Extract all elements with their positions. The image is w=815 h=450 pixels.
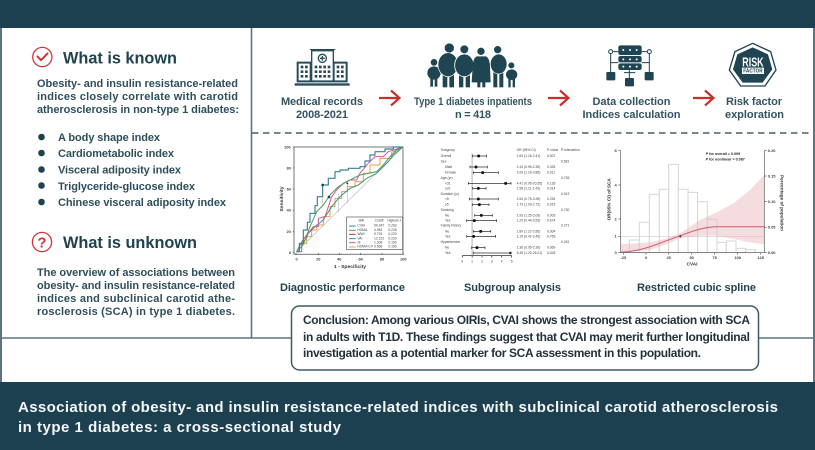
chart: ROC curves: 0.228 xyxy=(388,228,397,232)
chart: subgroup forest plot: 0.069 xyxy=(547,246,555,250)
chart: subgroup forest plot: 1.15 (0.42-3.45) xyxy=(517,234,540,238)
chart: ROC curves: Cutoff xyxy=(375,219,384,223)
chart: restricted cubic spline: 100 xyxy=(734,255,742,260)
chart: subgroup forest plot: 1.73 (1.09-2.72) xyxy=(517,203,540,207)
chart: subgroup forest plot: 0.028 xyxy=(547,251,555,255)
top banner xyxy=(0,0,815,28)
chart: restricted cubic spline: 75 xyxy=(712,255,718,260)
chart: subgroup forest plot: No xyxy=(445,229,449,233)
panel: what is unknown xyxy=(32,232,235,318)
chart: subgroup forest plot: Age (yr) xyxy=(441,176,453,180)
chart: restricted cubic spline: 0.20 xyxy=(768,148,776,153)
chart: ROC curves: Highest J xyxy=(387,219,402,223)
chart: ROC curves: 1 - Specificity xyxy=(334,264,366,270)
icon: red question circle xyxy=(32,232,52,252)
list of indices xyxy=(38,132,227,209)
chart: subgroup forest plot: 0.011 xyxy=(547,171,555,175)
chart: subgroup forest plot xyxy=(441,148,580,263)
chart: ROC curves: Sensitivity xyxy=(279,186,285,211)
chart: ROC curves: 20 xyxy=(286,229,292,234)
chart: restricted cubic spline: 0 xyxy=(615,250,618,255)
chart: subgroup forest plot: 1.93 (1.25-3.09) xyxy=(517,213,540,217)
text block: unknown summary: The overview of associations between xyxy=(37,267,235,279)
text block: unknown summary: rosclerosis (SCA) in type 1 diabetes. xyxy=(37,306,235,318)
icon: red check circle xyxy=(33,47,52,67)
chart: ROC curves: 100 xyxy=(284,144,291,149)
chart: ROC curves: WWI xyxy=(357,232,365,236)
chart: subgroup forest plot: No xyxy=(445,213,449,217)
label: risk factor exploration: Risk factor xyxy=(726,96,783,108)
label: medical records: 2008-2021 xyxy=(296,109,348,121)
text block: known summary xyxy=(37,78,239,116)
text block: known summary: indices closely correlate with carotid xyxy=(37,91,238,103)
chart: subgroup forest plot: 1.25 (0.44-3.53) xyxy=(517,219,540,223)
list of indices: Triglyceride-glucose index xyxy=(58,181,196,193)
chart: subgroup forest plot: 0.735 xyxy=(561,176,569,180)
chart: restricted cubic spline xyxy=(606,148,785,266)
chart: ROC curves: CVAI xyxy=(357,224,365,228)
chart: subgroup forest plot: 1.63 (1.16-2.41) xyxy=(517,154,540,158)
chart title: restricted cubic spline: Restricted cubic spline xyxy=(637,282,756,294)
chart: restricted cubic spline: 0.10 xyxy=(768,199,776,204)
chart: subgroup forest plot: 0.135 xyxy=(547,181,555,185)
chart: subgroup forest plot: No xyxy=(445,246,449,250)
text block: known summary: Obesity- and insulin resistance-related xyxy=(37,78,238,90)
chart: ROC curves: 0 xyxy=(296,257,299,262)
label: risk factor exploration xyxy=(725,96,784,121)
chart: subgroup forest plot: 0.004 xyxy=(547,229,555,233)
chart: subgroup forest plot: OR (95% CI) xyxy=(517,148,536,152)
label: data collection: Indices calculation xyxy=(582,109,681,121)
chart: ROC curves: 0 xyxy=(289,250,292,255)
chart: subgroup forest plot: 4.41 (0.95-20.55) xyxy=(517,181,542,185)
chart: restricted cubic spline: 2 xyxy=(615,216,618,221)
chart: restricted cubic spline: 6 xyxy=(615,148,618,153)
bottom title banner xyxy=(0,382,815,450)
chart: restricted cubic spline: 0.00 xyxy=(768,250,776,255)
list of indices: Visceral adiposity index xyxy=(58,164,182,176)
icon: red question circle: ? xyxy=(37,234,47,252)
panel: what is known xyxy=(33,47,239,209)
chart: restricted cubic spline: P for nonlinear = 0.087 xyxy=(706,158,745,162)
chart: subgroup forest plot: 0.281 xyxy=(561,240,569,244)
chart: ROC curves: 12.151 xyxy=(374,236,384,240)
chart: subgroup forest plot: Sex xyxy=(441,159,447,163)
chart: subgroup forest plot: Smoking xyxy=(441,208,454,212)
list of indices: A body shape index xyxy=(58,132,161,144)
chart: ROC curves xyxy=(279,144,407,270)
chart: subgroup forest plot: 3 xyxy=(491,259,493,263)
chart: subgroup forest plot: 0.007 xyxy=(547,154,555,158)
list of indices: Cardiometabolic index xyxy=(58,148,175,160)
chart: subgroup forest plot: Duration (yr) xyxy=(441,192,459,196)
chart: ROC curves: 40 xyxy=(337,257,342,262)
chart: restricted cubic spline: 125 xyxy=(757,255,765,260)
chart: subgroup forest plot: 0.730 xyxy=(561,208,569,212)
chart: ROC curves: 60 xyxy=(358,257,364,262)
chart: subgroup forest plot: Overall xyxy=(441,154,451,158)
chart: subgroup forest plot: ≥5 xyxy=(445,203,449,207)
chart: ROC curves: 0.220 xyxy=(388,232,397,236)
label: type 1 diabetes inpatients: n = 418 xyxy=(455,109,491,121)
arrow: step 1 xyxy=(379,90,400,106)
chart: subgroup forest plot: 0.014 xyxy=(547,186,555,190)
chart: ROC curves: 80 xyxy=(380,257,385,262)
chart: subgroup forest plot: 2 xyxy=(481,259,483,263)
chart: subgroup forest plot: 1.43 (0.99-2.35) xyxy=(517,165,540,169)
chart: restricted cubic spline: 25 xyxy=(666,255,672,260)
chart: ROC curves: 20 xyxy=(316,257,321,262)
chart: subgroup forest plot: P-interaction xyxy=(561,148,580,152)
chart: ROC curves: HOMA-CV xyxy=(357,245,374,249)
chart: subgroup forest plot: Subgroup xyxy=(441,148,455,152)
chart: ROC curves: 100 xyxy=(400,257,407,262)
chart: subgroup forest plot: Male xyxy=(445,165,452,169)
icon: risk factor badge: FACTOR xyxy=(743,69,763,75)
chart: subgroup forest plot: 0.271 xyxy=(561,224,569,228)
chart: subgroup forest plot: Yes xyxy=(445,234,451,238)
label: type 1 diabetes inpatients xyxy=(414,96,532,121)
chart: restricted cubic spline: 0.05 xyxy=(768,225,776,230)
chart: ROC curves: SMI xyxy=(358,219,364,223)
label: medical records: Medical records xyxy=(281,96,363,108)
chart: subgroup forest plot: ≥31 xyxy=(445,186,451,190)
chart: ROC curves: 40 xyxy=(286,208,292,213)
arrow: step 2 xyxy=(548,90,568,106)
chart: subgroup forest plot: Female xyxy=(445,171,456,175)
chart: ROC curves: 0.150 xyxy=(388,240,397,244)
arrow: step 3 xyxy=(693,90,714,106)
list of indices: Chinese visceral adiposity index xyxy=(58,197,227,209)
chart: restricted cubic spline: -25 xyxy=(620,255,627,260)
chart: ROC curves: 0.568 xyxy=(374,245,382,249)
chart title: diagnostic performance: Diagnostic performance xyxy=(280,282,405,294)
callout: conclusion: investigation as a potential marker for SCA assessment in this population. xyxy=(303,346,701,360)
chart: subgroup forest plot: 1.64 (0.75-3.98) xyxy=(517,197,540,201)
chart: subgroup forest plot: 1.89 (1.22-2.85) xyxy=(517,229,540,233)
chart: restricted cubic spline: CVAI xyxy=(687,261,697,266)
chart: subgroup forest plot: 1.58 (1.11-2.43) xyxy=(517,186,540,190)
text block: unknown summary: obesity- and insulin resistance-related xyxy=(37,280,235,292)
chart: subgroup forest plot: 0.015 xyxy=(547,203,555,207)
chart: ROC curves: SI xyxy=(357,240,361,244)
icon: risk factor badge: RISK xyxy=(742,55,764,69)
chart: ROC curves: 1.308 xyxy=(374,240,382,244)
chart: subgroup forest plot: Yes xyxy=(445,219,451,223)
callout: conclusion xyxy=(292,306,758,370)
chart: ROC curves: 80 xyxy=(286,165,292,170)
chart title: subgroup analysis: Subgroup analysis xyxy=(464,282,561,294)
chart: restricted cubic spline: Percentage of population xyxy=(780,175,785,231)
chart: restricted cubic spline: 50 xyxy=(689,255,695,260)
icon: group of people xyxy=(427,43,517,87)
callout: conclusion: Conclusion: Among various OIRIs, CVAI shows the strongest association with SCA xyxy=(303,313,750,327)
label: data collection: Data collection xyxy=(592,96,671,108)
chart: subgroup forest plot: 1 xyxy=(471,259,473,263)
chart: subgroup forest plot: Hypertension xyxy=(441,240,460,244)
label: data collection xyxy=(582,96,681,121)
chart: ROC curves: 9.793 xyxy=(374,232,382,236)
chart: ROC curves: HOMA xyxy=(357,228,368,232)
chart: restricted cubic spline: OR(95% CI) of SCA xyxy=(606,178,611,220)
chart: subgroup forest plot: 5.45 (1.20-26.21) xyxy=(517,251,542,255)
chart: restricted cubic spline: 0 xyxy=(645,255,648,260)
chart: subgroup forest plot: Yes xyxy=(445,251,451,255)
chart: subgroup forest plot: P-value xyxy=(547,148,558,152)
chart: subgroup forest plot: 0.674 xyxy=(547,219,555,223)
chart: subgroup forest plot: 2.09 (1.19-3.85) xyxy=(517,171,540,175)
chart: ROC curves: 0.220 xyxy=(388,236,397,240)
chart: ROC curves: 0.263 xyxy=(388,224,397,228)
chart: ROC curves: 60 xyxy=(286,186,292,191)
chart: subgroup forest plot: 4 xyxy=(501,259,503,263)
chart: subgroup forest plot: <31 xyxy=(445,181,451,185)
chart: restricted cubic spline: P for overall = 0.009 xyxy=(706,152,740,156)
icon: hospital xyxy=(295,49,350,86)
icon: database network xyxy=(606,45,654,86)
chart: subgroup forest plot: 1.38 (0.95-2.30) xyxy=(517,246,540,250)
chart: ROC curves: 0.150 xyxy=(388,245,397,249)
chart: restricted cubic spline: 4 xyxy=(615,182,618,187)
bottom title banner: Association of obesity- and insulin resistance-related indices with subclinical carotid atherosclerosis xyxy=(18,399,778,416)
callout: conclusion: in adults with T1D. These findings suggest that CVAI may merit further longitudinal xyxy=(303,330,750,344)
heading: what is known: What is known xyxy=(63,48,177,68)
chart: subgroup forest plot: 0.913 xyxy=(561,192,569,196)
chart: ROC curves: 59.347 xyxy=(374,224,384,228)
icon: risk factor badge xyxy=(729,43,776,86)
label: risk factor exploration: exploration xyxy=(725,109,784,121)
text block: unknown summary: indices and subclinical carotid athe- xyxy=(37,293,235,305)
chart: subgroup forest plot: 0.003 xyxy=(547,213,555,217)
chart: subgroup forest plot: 0.769 xyxy=(547,234,555,238)
chart: subgroup forest plot: 0.254 xyxy=(547,197,555,201)
chart: subgroup forest plot: 0.581 xyxy=(561,159,569,163)
label: type 1 diabetes inpatients: Type 1 diabetes inpatients xyxy=(414,96,532,108)
chart: subgroup forest plot: 0.325 xyxy=(547,165,555,169)
chart: restricted cubic spline: 0.15 xyxy=(768,173,776,178)
chart: subgroup forest plot: <5 xyxy=(445,197,449,201)
text block: known summary: atherosclerosis in non-type 1 diabetes: xyxy=(37,104,239,116)
chart: subgroup forest plot: Family history xyxy=(441,224,462,228)
chart: subgroup forest plot: 0 xyxy=(461,259,463,263)
chart: subgroup forest plot: 5 xyxy=(511,259,513,263)
chart: ROC curves: VAI xyxy=(357,236,363,240)
chart: ROC curves: 4.983 xyxy=(374,228,382,232)
label: medical records xyxy=(281,96,363,121)
heading: what is unknown: What is unknown xyxy=(63,233,197,252)
bottom title banner: in type 1 diabetes: a cross-sectional study xyxy=(18,419,342,436)
chart: restricted cubic spline: 1 xyxy=(615,234,618,239)
text block: unknown summary xyxy=(37,267,235,318)
frame lines xyxy=(0,28,815,382)
